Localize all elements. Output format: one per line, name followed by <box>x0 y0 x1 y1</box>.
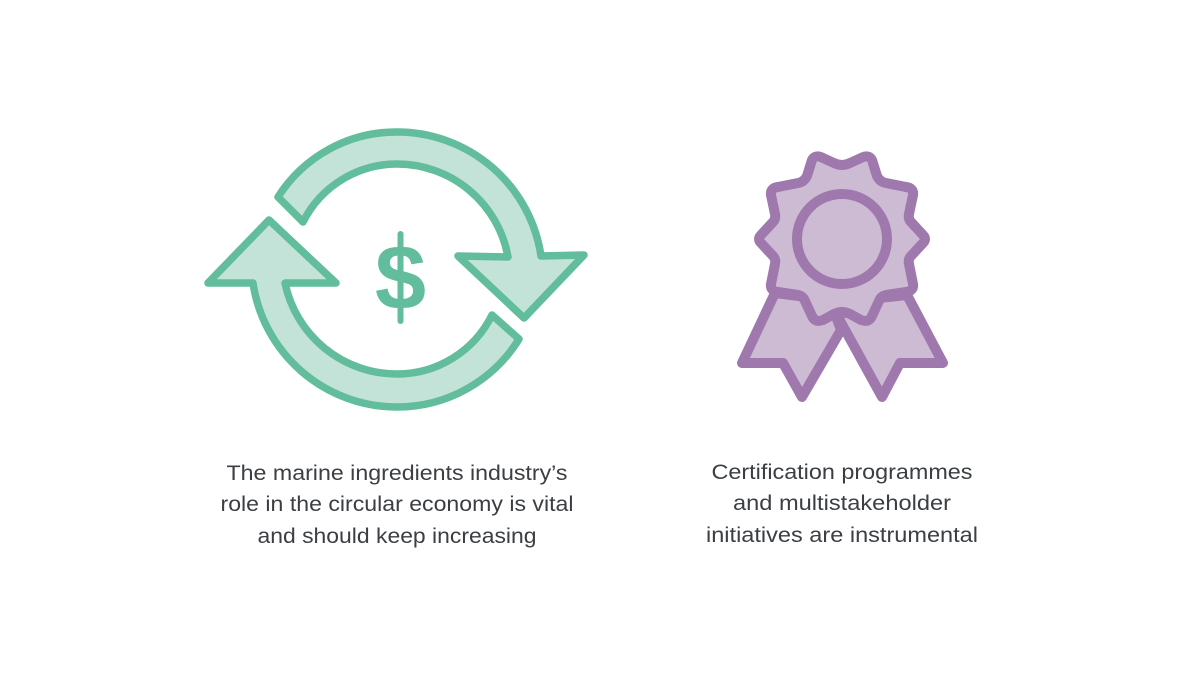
rosette <box>759 156 925 321</box>
text block: certification: initiatives are instrumental <box>706 524 978 547</box>
text block: circular economy: role in the circular economy is vital <box>220 493 574 516</box>
bottom arrow <box>208 220 519 407</box>
right ribbon <box>838 295 943 397</box>
top arrow <box>278 132 584 318</box>
text block: circular economy: and should keep increasing <box>258 525 536 548</box>
inner circle <box>797 194 887 284</box>
icon: award rosette <box>742 156 943 397</box>
icon: circular arrows with dollar sign <box>208 132 584 407</box>
text block: certification <box>706 461 978 547</box>
text block: certification: Certification programmes <box>712 461 972 484</box>
text block: certification: and multistakeholder <box>733 492 951 515</box>
text block: circular economy <box>220 462 574 548</box>
text block: circular economy: The marine ingredients industry’s <box>226 462 568 485</box>
dollar sign: $ <box>375 227 426 329</box>
left ribbon <box>742 293 841 397</box>
